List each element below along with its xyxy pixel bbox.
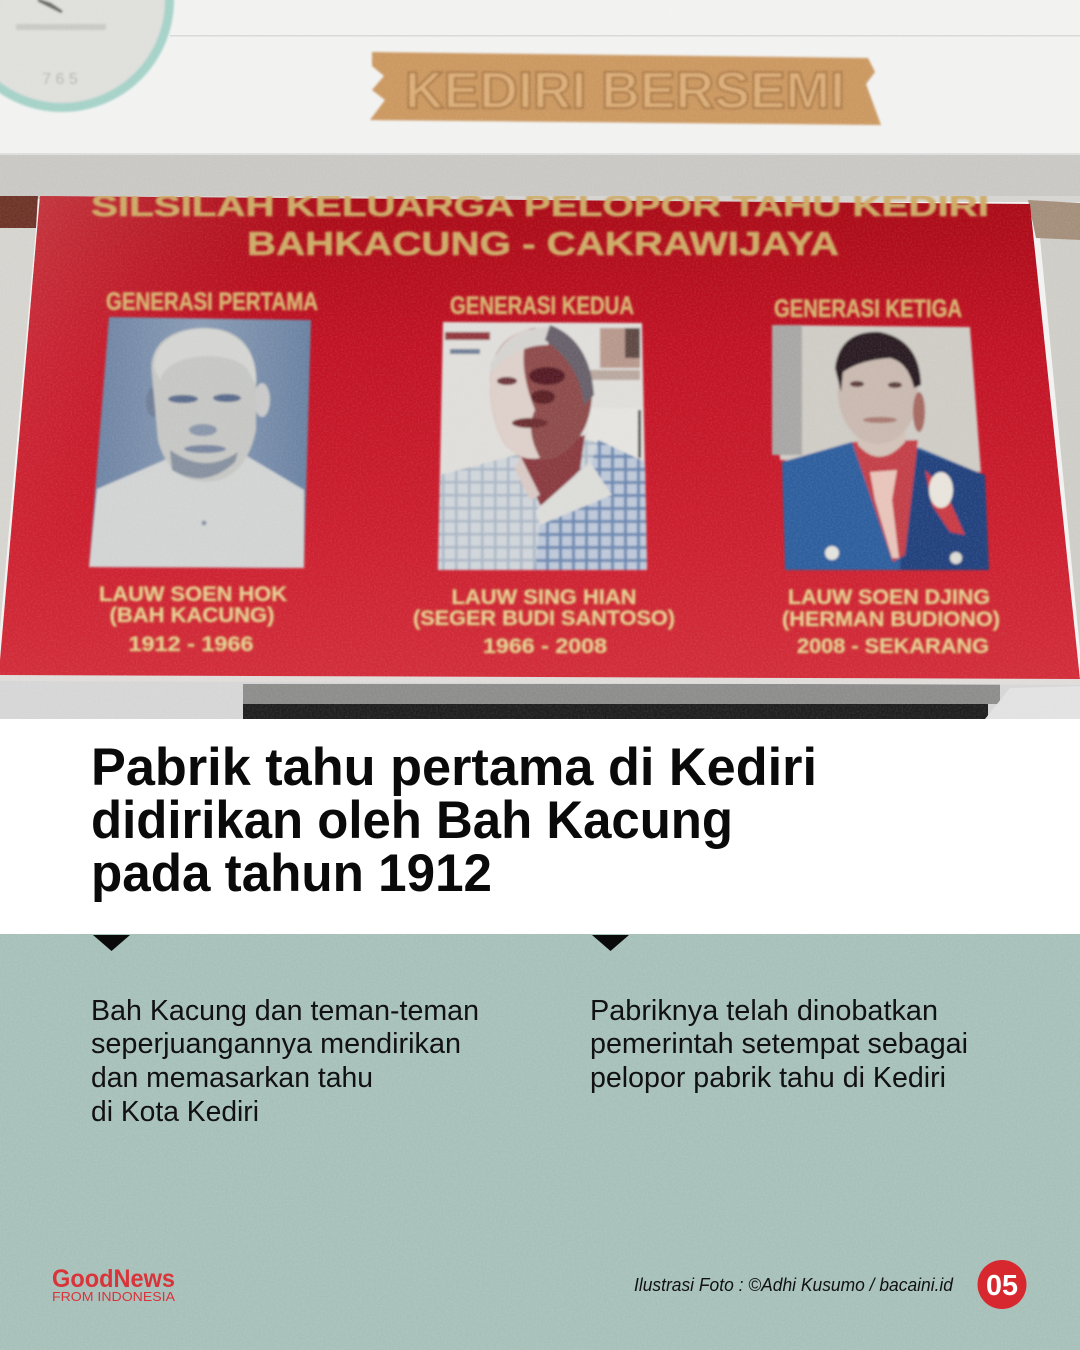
wooden sign [370, 52, 881, 125]
name captions: 1912 - 1966 [128, 633, 254, 656]
icon: left pointer arrow [93, 935, 130, 951]
generation labels: GENERASI PERTAMA [106, 288, 318, 316]
title: Pabrik tahu pertama di Kediri [91, 738, 817, 797]
name captions: (SEGER BUDI SANTOSO) [413, 607, 675, 630]
icon: wall clock: 7 6 5 [42, 71, 78, 88]
wooden sign: KEDIRI BERSEMI [405, 62, 845, 120]
page number badge: 05 [986, 1270, 1018, 1302]
left text block [91, 995, 479, 1128]
banner heading [91, 190, 989, 262]
left text block: di Kota Kediri [91, 1096, 259, 1128]
right text block: pemerintah setempat sebagai [590, 1028, 968, 1060]
left text block: dan memasarkan tahu [91, 1062, 373, 1094]
name captions: 2008 - SEKARANG [797, 635, 989, 658]
name captions: LAUW SOEN DJING [788, 586, 990, 609]
name captions: (BAH KACUNG) [110, 604, 274, 627]
logo: GoodNews from Indonesia: FROM INDONESIA [52, 1289, 175, 1304]
name captions [99, 583, 1000, 658]
banner heading: SILSILAH KELUARGA PELOPOR TAHU KEDIRI [91, 190, 989, 223]
title: pada tahun 1912 [91, 844, 492, 903]
title [91, 738, 817, 903]
portrait: first generation [89, 317, 311, 568]
left text block: seperjuangannya mendirikan [91, 1028, 461, 1060]
name captions: (HERMAN BUDIONO) [782, 608, 1000, 631]
generation labels: GENERASI KEDUA [450, 292, 634, 320]
name captions: LAUW SOEN HOK [99, 583, 287, 606]
generation labels [106, 288, 962, 323]
left text block: Bah Kacung dan teman-teman [91, 995, 479, 1027]
name captions: 1966 - 2008 [483, 635, 607, 658]
name captions: LAUW SING HIAN [452, 586, 636, 609]
logo: GoodNews from Indonesia [52, 1265, 175, 1304]
right text block: pelopor pabrik tahu di Kediri [590, 1062, 946, 1094]
title panel [0, 719, 1080, 934]
portrait: third generation [772, 325, 989, 570]
portrait: second generation [438, 322, 647, 570]
page number badge [978, 1260, 1026, 1309]
title: didirikan oleh Bah Kacung [91, 791, 733, 850]
red banner [0, 196, 1080, 680]
banner heading: BAHKACUNG - CAKRAWIJAYA [247, 225, 839, 262]
photo: family lineage banner [0, 0, 1080, 719]
right text block [590, 995, 968, 1094]
photo credit: Ilustrasi Foto : ©Adhi Kusumo / bacaini.id [634, 1275, 954, 1295]
right text block: Pabriknya telah dinobatkan [590, 995, 938, 1027]
logo: GoodNews from Indonesia: GoodNews [52, 1265, 175, 1293]
icon: right pointer arrow [592, 935, 629, 951]
icon: wall clock [0, 0, 174, 112]
teal content panel [0, 934, 1080, 1350]
generation labels: GENERASI KETIGA [774, 295, 962, 323]
